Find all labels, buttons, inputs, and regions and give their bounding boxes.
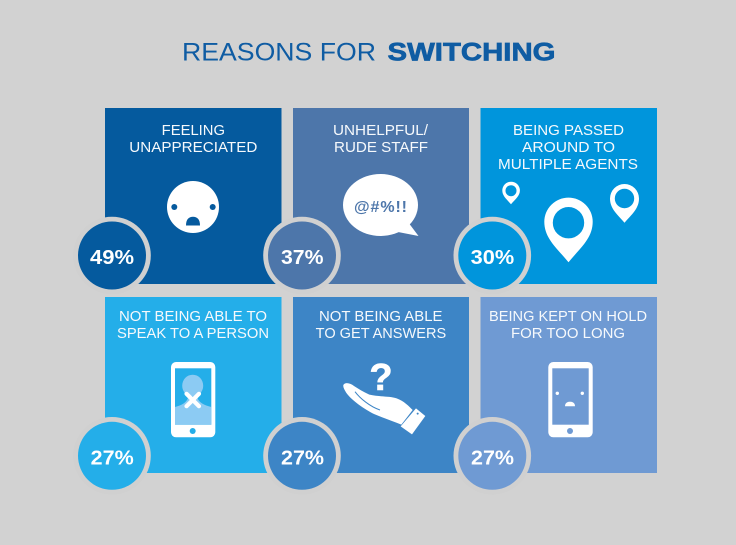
icon: hand with question mark — [343, 357, 425, 434]
title: REASONS FOR — [182, 39, 376, 67]
label: unhelpful rude staff: RUDE STAFF — [334, 140, 428, 156]
icon: phone with crossed person — [171, 362, 215, 437]
icon: sad face — [167, 181, 219, 233]
icon: sad phone — [548, 362, 593, 437]
panel: not able to speak to a person — [105, 297, 282, 473]
label: being passed around: BEING PASSED — [513, 123, 624, 139]
label: being passed around: MULTIPLE AGENTS — [498, 157, 638, 173]
badge: 27% speak to a person: 27% — [91, 447, 134, 469]
label: not able to get answers: NOT BEING ABLE — [319, 309, 443, 325]
label: kept on hold: BEING KEPT ON HOLD — [489, 309, 647, 325]
label: not able to speak to a person: NOT BEING ABLE TO — [119, 309, 267, 325]
icon: speech bubble: @#%!! — [354, 199, 407, 216]
label: unhelpful rude staff: UNHELPFUL/ — [333, 123, 429, 139]
panel: unhelpful rude staff — [293, 108, 469, 284]
panel: being passed around — [480, 108, 657, 284]
label: feeling unappreciated: FEELING — [162, 123, 225, 139]
badge: 49% — [73, 217, 151, 294]
badge: 49%: 49% — [90, 247, 134, 269]
badge: 27% on hold — [454, 417, 531, 495]
badge: 27% on hold: 27% — [471, 447, 514, 469]
panel: not able to get answers — [293, 297, 469, 473]
label: kept on hold: FOR TOO LONG — [511, 326, 625, 342]
panel: kept on hold — [480, 297, 657, 473]
label: feeling unappreciated: UNAPPRECIATED — [129, 140, 257, 156]
label: not able to speak to a person: SPEAK TO A PERSON — [117, 326, 269, 342]
label: feeling unappreciated — [129, 123, 257, 156]
label: kept on hold — [489, 309, 647, 342]
label: unhelpful rude staff — [333, 123, 429, 156]
badge: 27% speak to a person — [73, 417, 151, 495]
icon: medium map pin — [610, 184, 639, 223]
badge: 27% get answers: 27% — [281, 447, 324, 469]
icon: large map pin — [544, 198, 593, 262]
icon: speech bubble — [343, 174, 418, 236]
badge: 30% — [454, 217, 531, 294]
badge: 37% — [263, 217, 341, 294]
badge: 27% get answers — [263, 417, 341, 495]
icon: small map pin — [502, 182, 520, 204]
label: not able to speak to a person — [117, 309, 269, 342]
icon: hand with question mark: ? — [369, 357, 393, 399]
panel: feeling unappreciated — [105, 108, 282, 284]
label: being passed around: AROUND TO — [522, 140, 615, 156]
label: being passed around — [498, 123, 638, 173]
badge: 30%: 30% — [471, 247, 514, 269]
title: SWITCHING — [388, 39, 556, 67]
badge: 37%: 37% — [281, 247, 324, 269]
label: not able to get answers — [316, 309, 446, 342]
title — [182, 39, 556, 67]
label: not able to get answers: TO GET ANSWERS — [316, 326, 446, 342]
